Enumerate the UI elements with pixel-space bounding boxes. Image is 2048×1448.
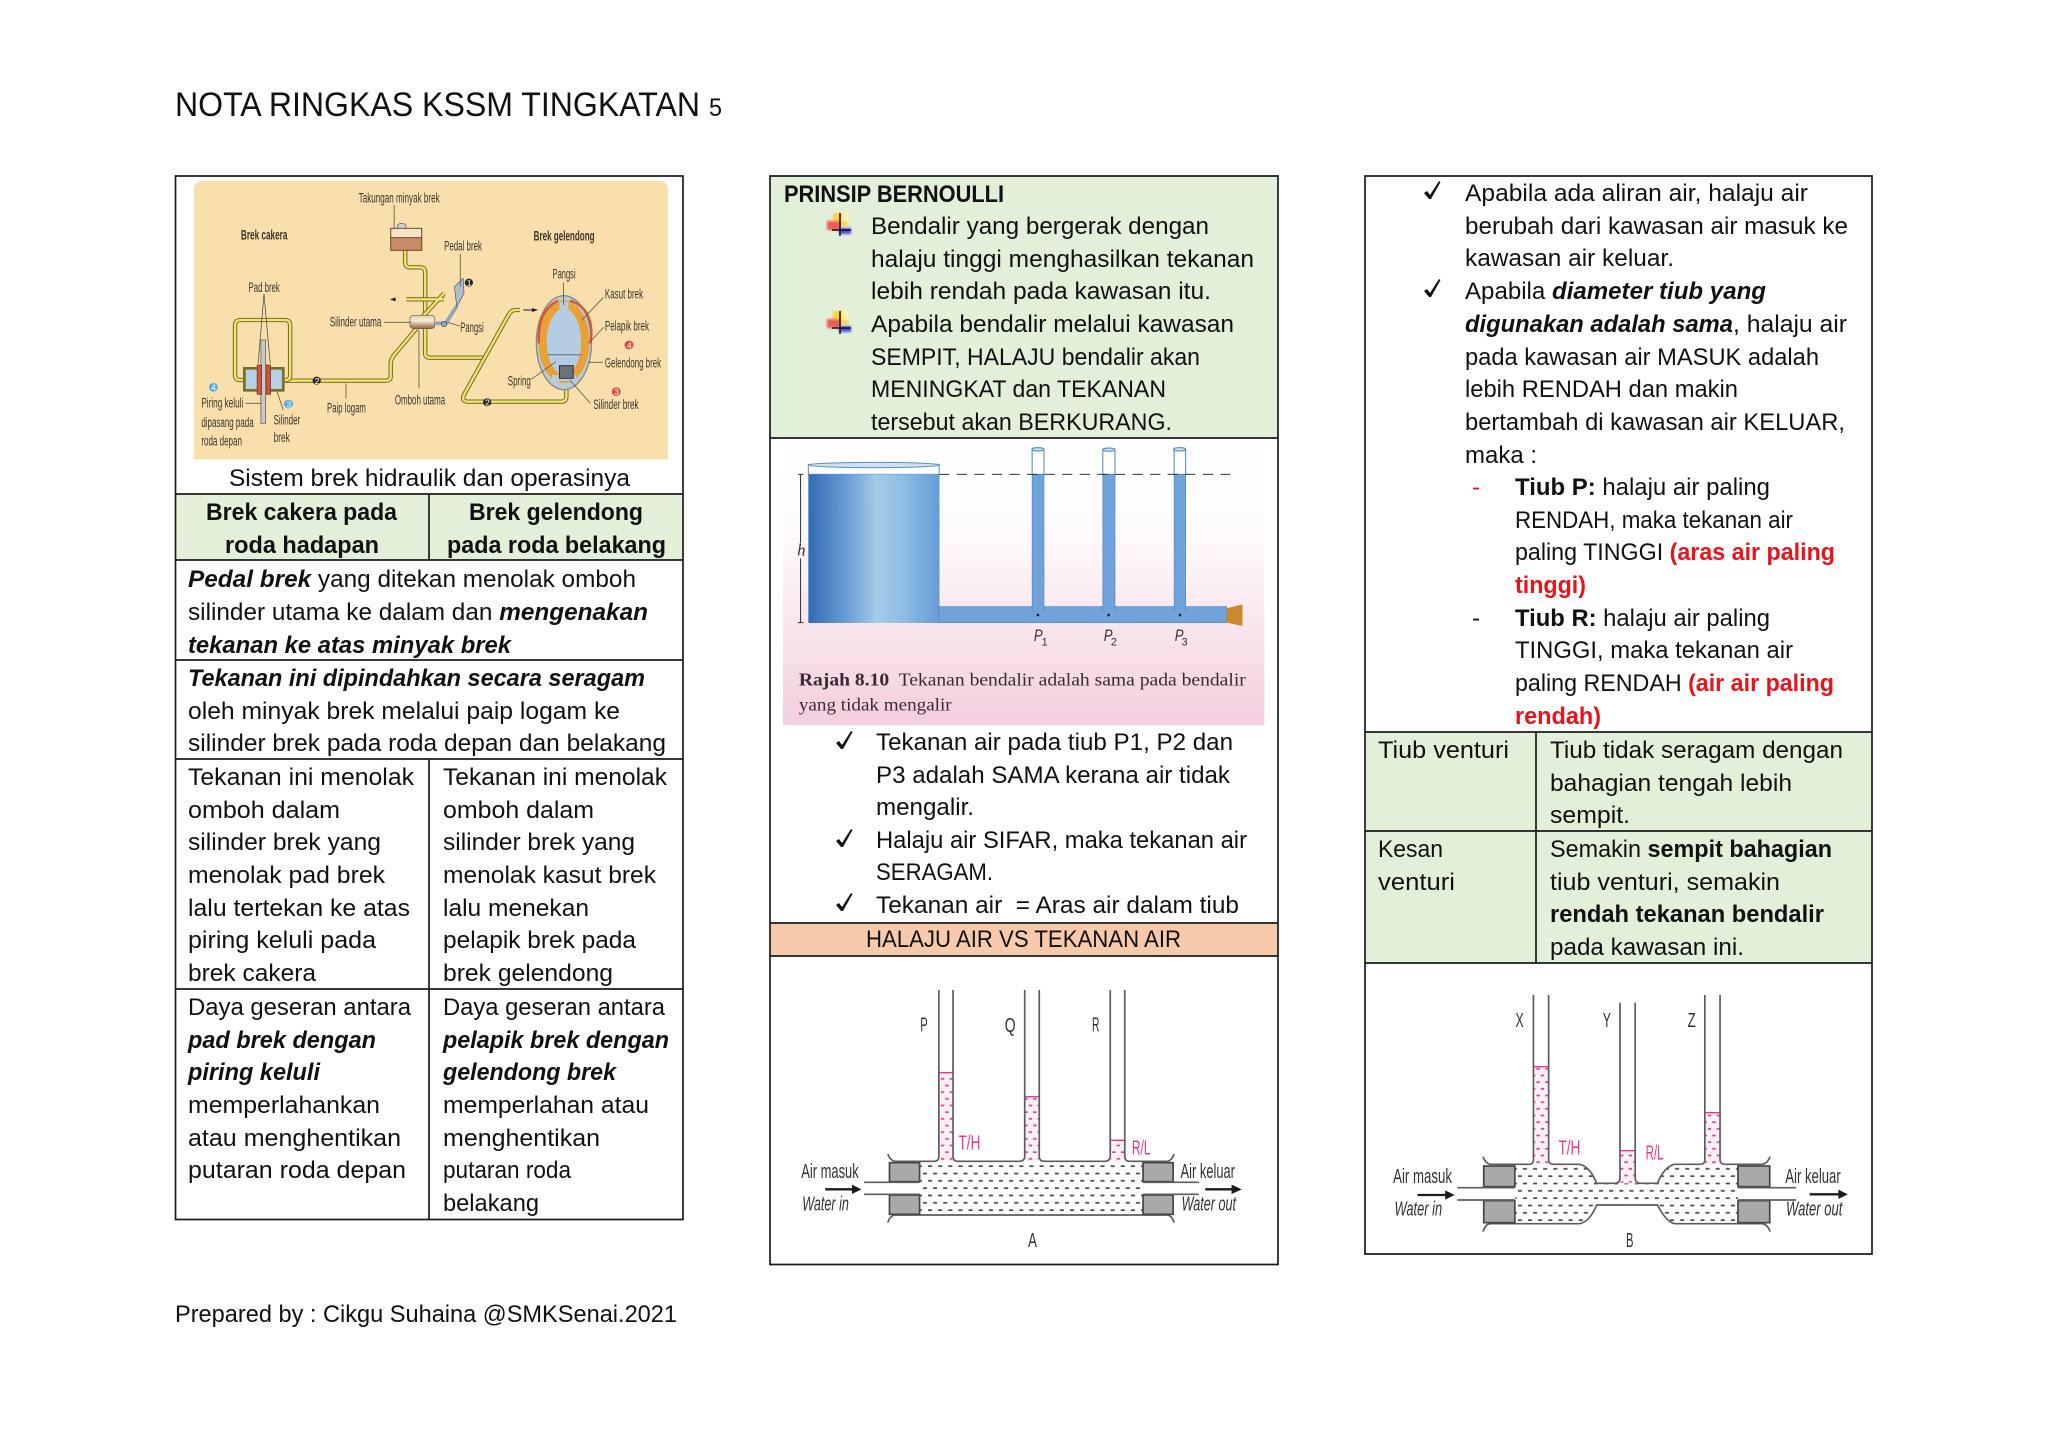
figure: uniform tube A: Air keluar bbox=[1181, 1161, 1235, 1183]
sub-item: tiub P: Tiub P: halaju air paling bbox=[1515, 474, 1770, 501]
numbered markers: 4 bbox=[211, 383, 216, 393]
figure: venturi tube B: X bbox=[1516, 1010, 1524, 1032]
green rows background bbox=[1365, 732, 1872, 963]
cell: daya geseran belakang: pelapik brek dengan bbox=[442, 1027, 669, 1054]
header: brek cakera: roda hadapan bbox=[225, 532, 379, 559]
cell: kasut brek operation: menolak kasut brek bbox=[443, 862, 657, 889]
figure: hydraulic brake diagram: Piring keluli bbox=[201, 396, 243, 412]
disc and caliper bbox=[244, 340, 283, 423]
text: diameter tiub: Apabila diameter tiub yang bbox=[1465, 278, 1766, 305]
sub-item: tiub R bbox=[1472, 605, 1834, 730]
numbered markers: 4 bbox=[627, 340, 632, 350]
section bar: halaju vs tekanan bbox=[770, 923, 1278, 956]
cell: kasut brek operation: lalu menekan bbox=[443, 895, 589, 922]
cell: pad brek operation: piring keluli pada bbox=[188, 927, 376, 954]
section bar: halaju vs tekanan: HALAJU AIR VS TEKANAN AIR bbox=[866, 926, 1181, 953]
row: tekanan dipindahkan: silinder brek pada roda depan dan belakang bbox=[188, 730, 666, 757]
cell: kasut brek operation: brek gelendong bbox=[443, 960, 613, 987]
bullet text two bbox=[871, 311, 1234, 436]
sub-item: tiub P: paling TINGGI (aras air paling bbox=[1515, 539, 1835, 566]
figure: hydraulic brake diagram: roda depan bbox=[201, 434, 242, 449]
text: aliran air: kawasan air keluar. bbox=[1465, 245, 1674, 272]
text: diameter tiub: digunakan adalah sama bbox=[1465, 311, 1733, 338]
term: kesan venturi: Kesan bbox=[1378, 836, 1443, 863]
cell: daya geseran belakang: belakang bbox=[443, 1190, 539, 1217]
figure: hydraulic brake diagram: Paip logam bbox=[327, 401, 366, 417]
sub-item: tiub P: RENDAH, maka tekanan air bbox=[1515, 507, 1793, 534]
sub-item: tiub R: rendah) bbox=[1515, 703, 1601, 730]
cell: kasut brek operation: omboh dalam bbox=[443, 797, 594, 824]
panel: brek hidraulik table bbox=[175, 176, 683, 1220]
bullet text two: Apabila bendalir melalui kawasan bbox=[871, 311, 1234, 338]
green intro background bbox=[770, 176, 1278, 438]
text: aliran air: berubah dari kawasan air masuk ke bbox=[1465, 213, 1848, 240]
figure: hydraulic brake diagram: Kasut brek bbox=[605, 287, 644, 303]
bullet text one bbox=[871, 213, 1254, 305]
figure: hydraulic brake diagram: Pad brek bbox=[248, 280, 280, 296]
title: 5 bbox=[709, 94, 722, 122]
figure: uniform tube A: Water in bbox=[802, 1193, 849, 1215]
sub-item: tiub R: - bbox=[1472, 605, 1480, 632]
sub-item: tiub R: paling RENDAH (air air paling bbox=[1515, 670, 1834, 697]
text: tekanan sama: P3 adalah SAMA kerana air tidak bbox=[876, 762, 1231, 789]
numbered markers: 2 bbox=[315, 376, 320, 386]
text: diameter tiub: lebih RENDAH dan makin bbox=[1465, 376, 1738, 403]
term: kesan venturi bbox=[1378, 836, 1455, 896]
definition: tiub venturi: Tiub tidak seragam dengan bbox=[1550, 737, 1843, 764]
figure: hydraulic brake diagram: Takungan minyak brek bbox=[359, 191, 440, 207]
cell: pad brek operation: silinder brek yang bbox=[188, 829, 381, 856]
text: diameter tiub: maka : bbox=[1465, 442, 1537, 469]
figure: hydraulic brake diagram: brek bbox=[274, 430, 290, 446]
row: tekanan dipindahkan: Tekanan ini dipindahkan secara seragam bbox=[188, 665, 645, 692]
text: halaju sifar bbox=[876, 827, 1247, 886]
definition: kesan venturi: pada kawasan ini. bbox=[1550, 934, 1744, 961]
icon: check one bbox=[836, 731, 852, 749]
figure: static fluid pressure: yang tidak mengalir bbox=[799, 694, 952, 714]
cell: pad brek operation bbox=[188, 764, 415, 987]
cell: pad brek operation: brek cakera bbox=[188, 960, 316, 987]
figure: uniform tube A: R bbox=[1092, 1014, 1099, 1036]
definition: kesan venturi bbox=[1550, 836, 1832, 961]
figure: uniform tube A: T/H bbox=[958, 1133, 980, 1155]
cell: daya geseran belakang: memperlahan atau bbox=[443, 1092, 649, 1119]
figure: hydraulic brake diagram: Gelendong brek bbox=[605, 356, 662, 372]
sub-item: tiub R: Tiub R: halaju air paling bbox=[1515, 605, 1770, 632]
cell: kasut brek operation: pelapik brek pada bbox=[443, 927, 636, 954]
text: aliran air bbox=[1465, 180, 1848, 272]
cell: daya geseran depan: pad brek dengan bbox=[187, 1027, 376, 1054]
leader lines bbox=[245, 205, 604, 410]
numbered markers bbox=[209, 278, 633, 409]
cell: kasut brek operation: Tekanan ini menolak bbox=[443, 764, 668, 791]
figure: static fluid pressure: P bbox=[1104, 626, 1113, 645]
numbered markers: 3 bbox=[614, 387, 619, 397]
drum brake bbox=[536, 296, 591, 390]
icon: check two bbox=[836, 829, 852, 847]
definition: kesan venturi: rendah tekanan bendalir bbox=[1550, 901, 1824, 928]
icon: bullet one bbox=[827, 213, 851, 236]
cell: daya geseran belakang: Daya geseran antara bbox=[443, 994, 665, 1021]
cell: kasut brek operation bbox=[443, 764, 668, 987]
header: brek cakera: Brek cakera pada bbox=[206, 499, 397, 526]
sub-item: tiub P: - bbox=[1472, 474, 1480, 501]
header: brek cakera bbox=[206, 499, 397, 559]
figure: venturi tube B: Y bbox=[1603, 1010, 1611, 1032]
figure: static fluid pressure: 2 bbox=[1111, 637, 1117, 649]
cell: daya geseran depan: memperlahankan bbox=[188, 1092, 380, 1119]
header row background bbox=[175, 494, 683, 560]
panel: prinsip Bernoulli column bbox=[770, 176, 1278, 1264]
text: aras air: Tekanan air = Aras air dalam tiub bbox=[876, 892, 1239, 919]
figure: venturi tube B: Air keluar bbox=[1785, 1166, 1841, 1188]
numbered markers: 2 bbox=[485, 398, 490, 408]
text: diameter tiub: bertambah di kawasan air KELUAR, bbox=[1465, 409, 1845, 436]
text: tekanan sama: Tekanan air pada tiub P1, P2 dan bbox=[876, 729, 1233, 756]
figure: static fluid pressure: 3 bbox=[1182, 637, 1188, 649]
cell: pad brek operation: Tekanan ini menolak bbox=[188, 764, 415, 791]
cell: daya geseran depan: Daya geseran antara bbox=[188, 994, 411, 1021]
figure: venturi tube B: Water out bbox=[1786, 1198, 1843, 1220]
cell: daya geseran depan: atau menghentikan bbox=[188, 1125, 401, 1152]
cell: kasut brek operation: silinder brek yang bbox=[443, 829, 635, 856]
icon: check five bbox=[1424, 279, 1440, 297]
cell: daya geseran belakang: gelendong brek bbox=[442, 1059, 617, 1086]
text: aliran air: Apabila ada aliran air, halaju air bbox=[1465, 180, 1808, 207]
term: tiub venturi: Tiub venturi bbox=[1378, 737, 1509, 764]
figure: venturi tube B: Z bbox=[1688, 1010, 1696, 1032]
figure: venturi tube B: Air masuk bbox=[1393, 1166, 1453, 1188]
row: tekanan dipindahkan bbox=[188, 665, 666, 757]
definition: kesan venturi: Semakin sempit bahagian bbox=[1550, 836, 1832, 863]
figure: hydraulic brake diagram bbox=[194, 181, 668, 459]
cell: daya geseran belakang: putaran roda bbox=[443, 1157, 571, 1184]
row: pedal brek: tekanan ke atas minyak brek bbox=[188, 632, 512, 659]
bullet text one: Bendalir yang bergerak dengan bbox=[871, 213, 1209, 240]
cell: pad brek operation: lalu tertekan ke atas bbox=[188, 895, 410, 922]
bullet text two: MENINGKAT dan TEKANAN bbox=[871, 376, 1166, 403]
figure: static fluid pressure: Rajah 8.10 Tekanan bendalir adalah sama pada bendalir bbox=[799, 669, 1246, 689]
panel: right column table bbox=[1365, 176, 1872, 1254]
heading: PRINSIP BERNOULLI bbox=[784, 181, 1004, 208]
text: diameter tiub: pada kawasan air MASUK adalah bbox=[1465, 344, 1819, 371]
figure: uniform tube A: A bbox=[1028, 1230, 1037, 1252]
figure: hydraulic brake diagram: Pangsi bbox=[460, 320, 484, 336]
figure: hydraulic brake diagram: Silinder bbox=[274, 413, 300, 428]
row: pedal brek: Pedal brek yang ditekan menolak omboh bbox=[188, 566, 636, 593]
icon: bullet two bbox=[827, 311, 851, 334]
numbered markers: 3 bbox=[286, 399, 291, 409]
icon: check three bbox=[836, 893, 852, 911]
figure: hydraulic brake diagram: dipasang pada bbox=[201, 415, 254, 431]
definition: tiub venturi: bahagian tengah lebih bbox=[1550, 770, 1792, 797]
bullet text one: halaju tinggi menghasilkan tekanan bbox=[871, 246, 1254, 273]
text: tekanan sama: mengalir. bbox=[876, 794, 974, 821]
row: pedal brek bbox=[188, 566, 648, 659]
figure: hydraulic brake diagram: Pangsi bbox=[553, 267, 576, 283]
title: NOTA RINGKAS KSSM TINGKATAN bbox=[175, 86, 700, 124]
text: diameter tiub: , halaju air bbox=[1733, 311, 1847, 338]
header: brek gelendong: pada roda belakang bbox=[447, 532, 666, 559]
cell: daya geseran belakang bbox=[442, 994, 669, 1217]
bullet text two: SEMPIT, HALAJU bendalir akan bbox=[871, 344, 1200, 371]
figure: venturi tube B: R/L bbox=[1646, 1142, 1664, 1164]
figure: uniform tube A: P bbox=[920, 1014, 928, 1036]
definition: kesan venturi: tiub venturi, semakin bbox=[1550, 869, 1780, 896]
header: brek gelendong bbox=[447, 499, 666, 559]
icon: check four bbox=[1424, 181, 1440, 199]
figure: hydraulic brake diagram: Omboh utama bbox=[395, 393, 445, 408]
figure: venturi tube B: T/H bbox=[1558, 1138, 1580, 1160]
footer credit: Prepared by : Cikgu Suhaina @SMKSenai.2021 bbox=[175, 1301, 677, 1328]
header: brek gelendong: Brek gelendong bbox=[469, 499, 643, 526]
figure: hydraulic brake diagram: Pedal brek bbox=[444, 239, 482, 254]
reservoir bbox=[391, 223, 422, 250]
figure caption: Sistem brek hidraulik dan operasinya bbox=[229, 465, 630, 492]
figure: hydraulic brake diagram: Silinder brek bbox=[593, 397, 639, 413]
definition: tiub venturi bbox=[1550, 737, 1843, 829]
cell: daya geseran depan: piring keluli bbox=[187, 1059, 321, 1086]
numbered markers: 1 bbox=[467, 278, 472, 288]
figure: static fluid pressure: P bbox=[1034, 626, 1043, 645]
figure: uniform tube A: Air masuk bbox=[801, 1161, 859, 1183]
cell: pad brek operation: menolak pad brek bbox=[188, 862, 386, 889]
figure: hydraulic brake diagram: Brek gelendong bbox=[534, 229, 595, 244]
figure: hydraulic brake diagram: Silinder utama bbox=[330, 315, 381, 330]
text: tekanan sama bbox=[876, 729, 1233, 821]
figure: uniform tube A: Q bbox=[1005, 1015, 1016, 1037]
sub-item: tiub P bbox=[1472, 474, 1835, 599]
cell: daya geseran depan: putaran roda depan bbox=[188, 1157, 406, 1184]
figure: static fluid pressure: h bbox=[797, 540, 806, 559]
figure: venturi tube B: Water in bbox=[1394, 1198, 1442, 1220]
figure: static fluid pressure: 1 bbox=[1042, 637, 1048, 649]
figure: hydraulic brake diagram: Brek cakera bbox=[241, 228, 287, 244]
definition: tiub venturi: sempit. bbox=[1550, 802, 1630, 829]
cell: pad brek operation: omboh dalam bbox=[188, 797, 340, 824]
figure: static fluid pressure bbox=[783, 439, 1264, 725]
figure: uniform tube A bbox=[801, 990, 1242, 1252]
figure: uniform tube A: R/L bbox=[1132, 1137, 1150, 1159]
bullet text two: tersebut akan BERKURANG. bbox=[871, 409, 1172, 436]
term: kesan venturi: venturi bbox=[1378, 869, 1455, 896]
row: pedal brek: silinder utama ke dalam dan mengenakan bbox=[188, 599, 648, 626]
sub-item: tiub P: tinggi) bbox=[1515, 572, 1586, 599]
bullet text one: lebih rendah pada kawasan itu. bbox=[871, 278, 1211, 305]
figure: static fluid pressure: P bbox=[1175, 626, 1184, 645]
figure: uniform tube A: Water out bbox=[1182, 1193, 1237, 1215]
text: halaju sifar: SERAGAM. bbox=[876, 859, 993, 886]
figure: venturi tube B: B bbox=[1626, 1230, 1633, 1252]
cell: daya geseran depan bbox=[187, 994, 411, 1184]
cell: daya geseran belakang: menghentikan bbox=[443, 1125, 600, 1152]
figure: hydraulic brake diagram: Pelapik brek bbox=[605, 319, 649, 334]
figure: hydraulic brake diagram: Spring bbox=[508, 374, 531, 389]
row: tekanan dipindahkan: oleh minyak brek melalui paip logam ke bbox=[188, 698, 620, 725]
text: diameter tiub bbox=[1465, 278, 1847, 469]
text: halaju sifar: Halaju air SIFAR, maka tekanan air bbox=[876, 827, 1247, 854]
figure: venturi tube B bbox=[1393, 995, 1848, 1252]
sub-item: tiub R: TINGGI, maka tekanan air bbox=[1515, 637, 1793, 664]
master cylinder and pedal bbox=[410, 278, 464, 329]
